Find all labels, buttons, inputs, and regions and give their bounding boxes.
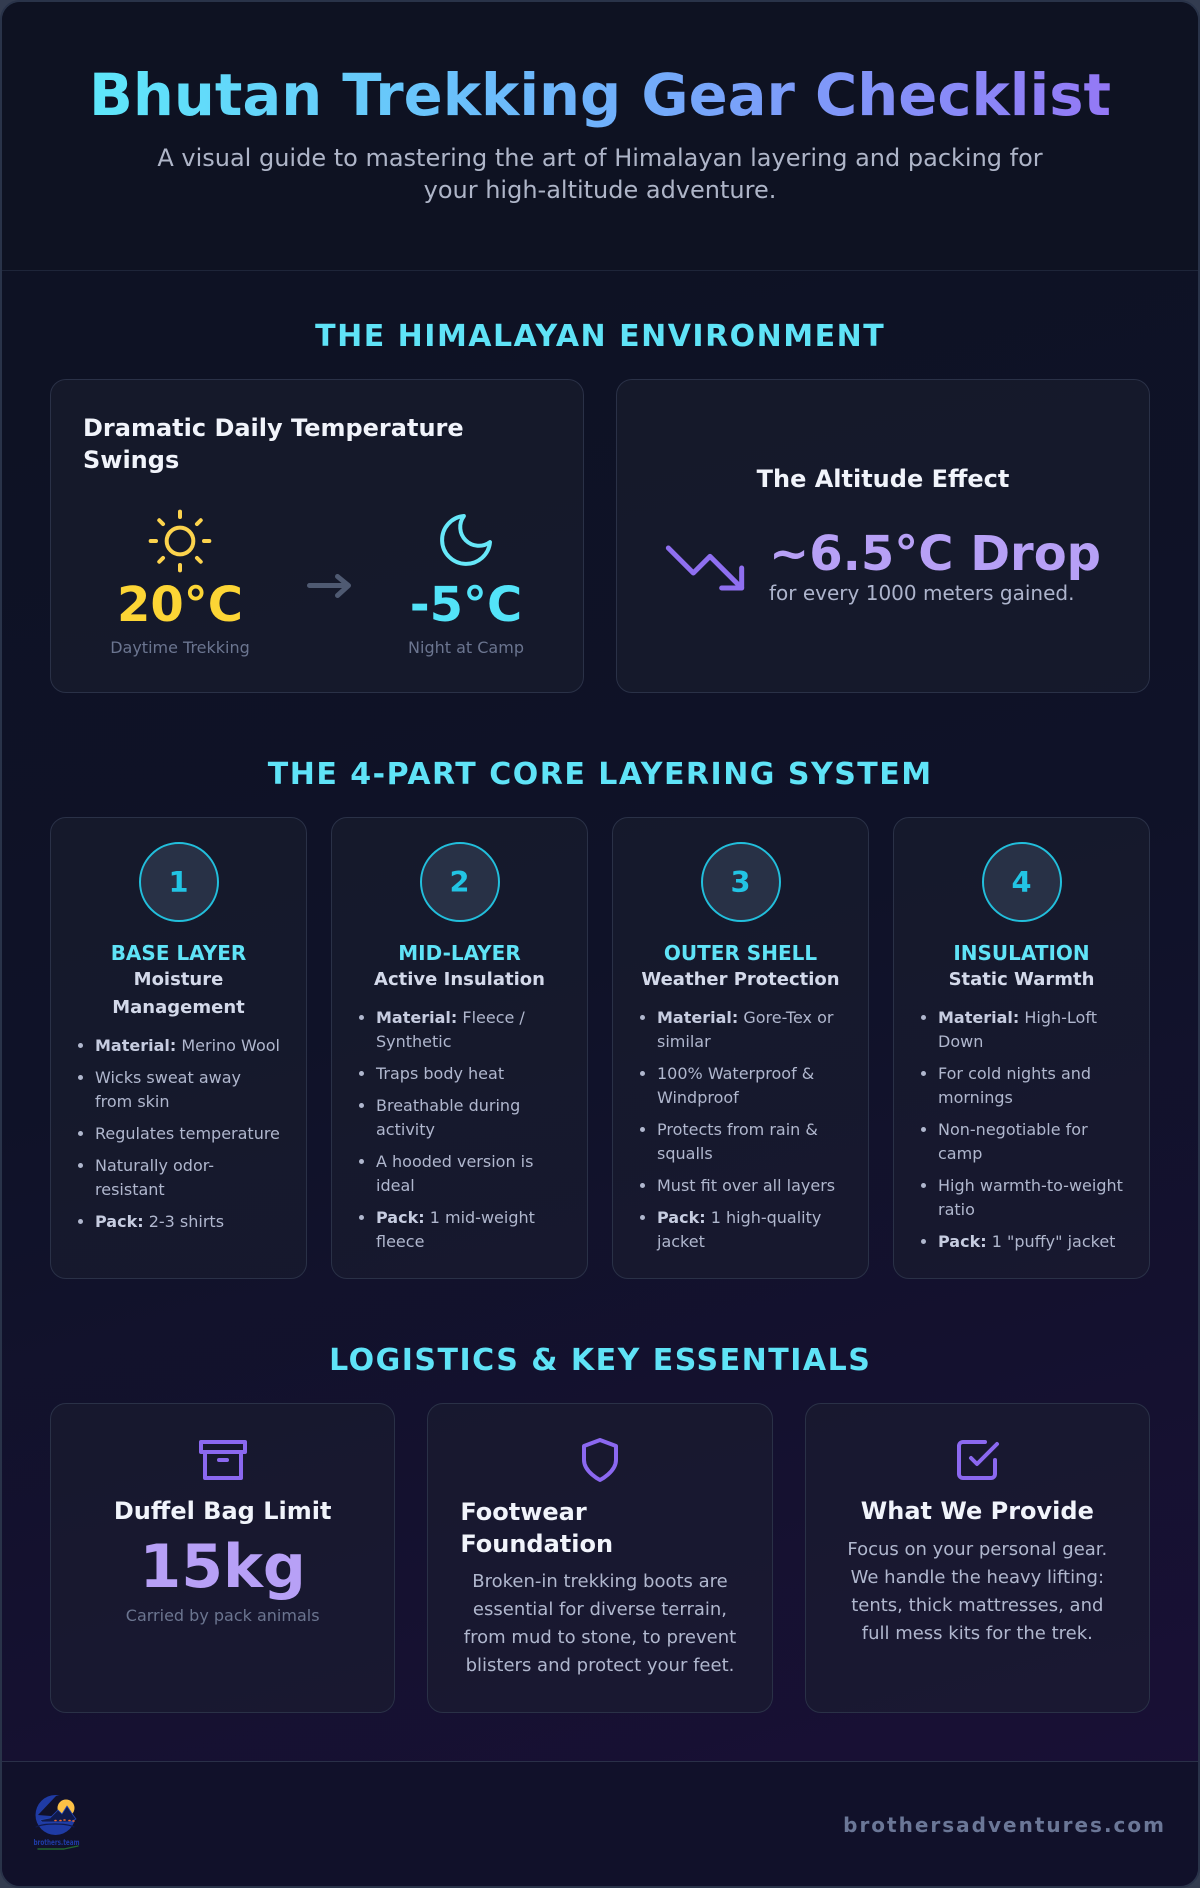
gear list: Pack: 1 mid-weight bbox=[376, 1208, 535, 1227]
subtitle: A visual guide to mastering the art of Himalayan layering and packing for bbox=[157, 144, 1043, 172]
gear list: Protects from rain & bbox=[657, 1120, 818, 1139]
gear list: Down bbox=[938, 1032, 983, 1051]
panel body text bbox=[464, 1570, 736, 1676]
number badge bbox=[138, 842, 218, 922]
layer purpose: Active Insulation bbox=[374, 969, 545, 990]
number badge bbox=[700, 842, 780, 922]
panel heading bbox=[460, 1498, 613, 1558]
number badge: 4 bbox=[1011, 865, 1032, 899]
panel heading: What We Provide bbox=[861, 1497, 1094, 1525]
icon: trending down bbox=[666, 546, 744, 590]
number badge bbox=[982, 842, 1062, 922]
daytime temperature: 20°C bbox=[117, 577, 243, 633]
arrow: day to night bbox=[307, 574, 351, 598]
panel heading: The Altitude Effect bbox=[757, 465, 1009, 493]
gear list: Material: Fleece / bbox=[376, 1008, 525, 1027]
panel: altitude effect bbox=[616, 379, 1150, 693]
number badge: 3 bbox=[730, 865, 751, 899]
gear list: Pack: 2-3 shirts bbox=[95, 1212, 224, 1231]
heading: core layering system: THE 4-PART CORE LAYERING SYSTEM bbox=[268, 757, 933, 792]
gear list bbox=[640, 1008, 835, 1251]
panel heading bbox=[83, 414, 464, 474]
layer purpose: Weather Protection bbox=[641, 969, 840, 990]
gear list bbox=[78, 1036, 280, 1231]
number badge: 2 bbox=[449, 865, 470, 899]
icon: sun bbox=[148, 510, 212, 572]
panel heading: Dramatic Daily Temperature bbox=[83, 414, 464, 442]
gear list: Windproof bbox=[657, 1088, 739, 1107]
panel heading: Foundation bbox=[460, 1530, 613, 1558]
layer purpose: Management bbox=[112, 997, 245, 1018]
panel: layer 4 insulation bbox=[893, 817, 1150, 1279]
panel body text: We handle the heavy lifting: bbox=[851, 1566, 1104, 1588]
layer purpose: Static Warmth bbox=[949, 969, 1094, 990]
layer name: BASE LAYER bbox=[111, 941, 246, 965]
subtitle bbox=[157, 144, 1043, 204]
number badge: 1 bbox=[168, 865, 189, 899]
panel heading: Duffel Bag Limit bbox=[114, 1497, 331, 1525]
gear list: Material: High-Loft bbox=[938, 1008, 1097, 1027]
panel body text: blisters and protect your feet. bbox=[466, 1654, 734, 1676]
altitude drop figure: ~6.5°C Drop bbox=[769, 526, 1101, 582]
gear list: ratio bbox=[938, 1200, 975, 1219]
gear list: Material: Gore-Tex or bbox=[657, 1008, 833, 1027]
number badge bbox=[420, 842, 500, 922]
gear list: Material: Merino Wool bbox=[95, 1036, 280, 1055]
altitude drop caption: for every 1000 meters gained. bbox=[769, 581, 1074, 605]
gear list: Naturally odor- bbox=[95, 1156, 214, 1175]
night label: Night at Camp bbox=[408, 638, 524, 657]
gear list: 100% Waterproof & bbox=[657, 1064, 814, 1083]
weight figure: 15kg bbox=[139, 1532, 306, 1602]
icon: archive box bbox=[199, 1440, 247, 1480]
panel body text: tents, thick mattresses, and bbox=[851, 1594, 1103, 1616]
gear list: squalls bbox=[657, 1144, 713, 1163]
website address: brothersadventures.com bbox=[843, 1813, 1166, 1837]
gear list: Regulates temperature bbox=[95, 1124, 280, 1143]
icon: shield bbox=[582, 1438, 618, 1482]
gear list: similar bbox=[657, 1032, 711, 1051]
panel body text: Broken-in trekking boots are bbox=[472, 1570, 728, 1592]
gear list: Breathable during bbox=[376, 1096, 520, 1115]
gear list: Non-negotiable for bbox=[938, 1120, 1088, 1139]
gear list: Synthetic bbox=[376, 1032, 452, 1051]
heading: logistics and key essentials: LOGISTICS & KEY ESSENTIALS bbox=[329, 1343, 871, 1378]
panel body text bbox=[847, 1538, 1107, 1644]
gear list: A hooded version is bbox=[376, 1152, 533, 1171]
icon: moon bbox=[440, 514, 492, 566]
panel: layer 1 base layer bbox=[50, 817, 307, 1279]
panel: layer 3 outer shell bbox=[612, 817, 869, 1279]
logo bbox=[34, 1795, 80, 1850]
gear list: jacket bbox=[657, 1232, 705, 1251]
gear list: High warmth-to-weight bbox=[938, 1176, 1123, 1195]
panel: what we provide bbox=[805, 1403, 1150, 1713]
gear list: ideal bbox=[376, 1176, 415, 1195]
panel body text: essential for diverse terrain, bbox=[473, 1598, 727, 1620]
panel: temperature swings bbox=[50, 379, 584, 693]
gear list: resistant bbox=[95, 1180, 165, 1199]
layer name: MID-LAYER bbox=[398, 941, 521, 965]
night temperature: -5°C bbox=[410, 577, 522, 633]
panel body text: full mess kits for the trek. bbox=[862, 1622, 1093, 1644]
gear list: For cold nights and bbox=[938, 1064, 1091, 1083]
panel: footwear foundation bbox=[427, 1403, 773, 1713]
layer name: OUTER SHELL bbox=[664, 941, 817, 965]
panel body text: from mud to stone, to prevent bbox=[464, 1626, 736, 1648]
gear list: Must fit over all layers bbox=[657, 1176, 835, 1195]
gear list: Traps body heat bbox=[376, 1064, 504, 1083]
heading: the himalayan environment: THE HIMALAYAN ENVIRONMENT bbox=[315, 319, 885, 354]
weight caption: Carried by pack animals bbox=[126, 1606, 320, 1625]
gear list: from skin bbox=[95, 1092, 170, 1111]
gear list bbox=[359, 1008, 535, 1251]
layer purpose bbox=[112, 969, 245, 1018]
header band bbox=[0, 0, 1200, 271]
gear list: Pack: 1 high-quality bbox=[657, 1208, 821, 1227]
panel body text: Focus on your personal gear. bbox=[847, 1538, 1107, 1560]
daytime label: Daytime Trekking bbox=[110, 638, 250, 657]
gear list: activity bbox=[376, 1120, 435, 1139]
layer name: INSULATION bbox=[953, 941, 1090, 965]
layer purpose: Moisture bbox=[134, 969, 223, 990]
footer band bbox=[0, 1761, 1200, 1888]
panel heading: Footwear bbox=[460, 1498, 587, 1526]
panel: layer 2 mid-layer bbox=[331, 817, 588, 1279]
gear list: Pack: 1 "puffy" jacket bbox=[938, 1232, 1115, 1251]
gear list: fleece bbox=[376, 1232, 424, 1251]
subtitle: your high-altitude adventure. bbox=[424, 176, 776, 204]
icon: check square bbox=[957, 1440, 1000, 1480]
panel: duffel bag limit bbox=[50, 1403, 395, 1713]
title: Bhutan Trekking Gear Checklist bbox=[89, 62, 1111, 129]
gear list bbox=[921, 1008, 1123, 1251]
gear list: mornings bbox=[938, 1088, 1013, 1107]
gear list: camp bbox=[938, 1144, 982, 1163]
panel heading: Swings bbox=[83, 446, 179, 474]
gear list: Wicks sweat away bbox=[95, 1068, 241, 1087]
